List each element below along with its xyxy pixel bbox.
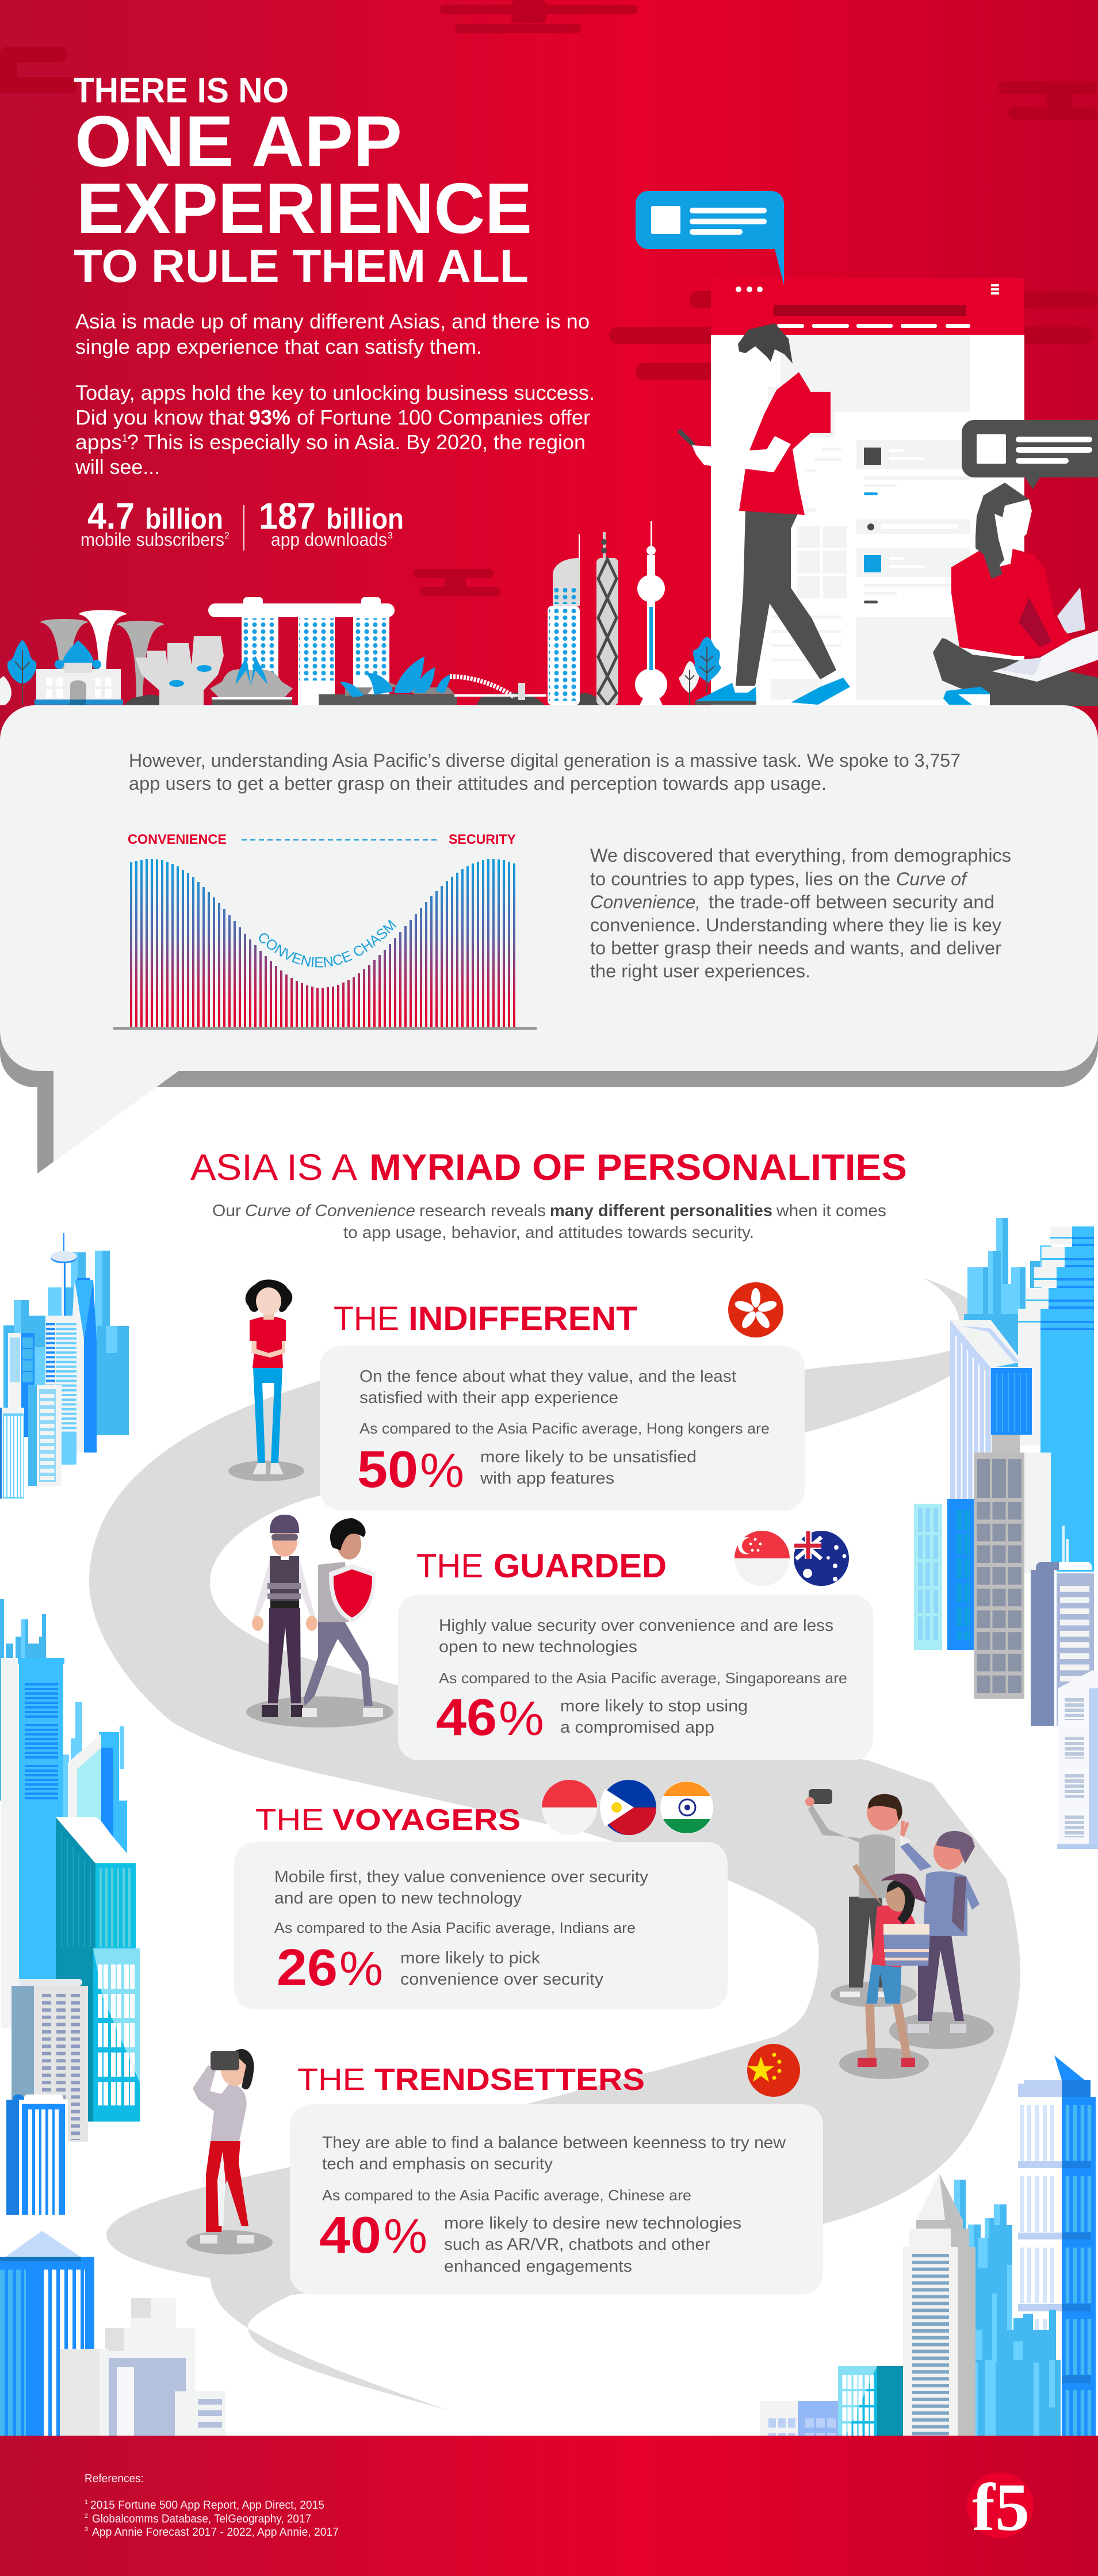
intro text: Today, apps hold the key to unlocking business success. xyxy=(75,381,595,404)
blue front block xyxy=(6,2095,68,2215)
references: 2015 Fortune 500 App Report, App Direct, 2015 xyxy=(90,2499,324,2512)
section intro: when it comes xyxy=(776,1202,886,1220)
description xyxy=(439,1616,847,1737)
discovery paragraph: Curve of xyxy=(896,869,968,889)
description: On the fence about what they value, and the least xyxy=(359,1367,736,1386)
section intro: research reveals xyxy=(419,1202,546,1220)
curve of convenience chart xyxy=(113,832,537,1030)
card xyxy=(290,2104,823,2294)
buildings: top right cluster xyxy=(914,1218,1098,1849)
woman with hat and bag xyxy=(852,1864,930,2067)
title: THE xyxy=(297,2062,365,2097)
shoe xyxy=(943,687,990,705)
description: more likely to desire new technologies xyxy=(444,2214,741,2233)
title: EXPERIENCE xyxy=(76,169,532,249)
security guard xyxy=(252,1515,317,1717)
description: such as AR/VR, chatbots and other xyxy=(444,2235,710,2254)
characters: travellers xyxy=(805,1789,994,2079)
title: TO RULE THEM ALL xyxy=(74,240,529,292)
description: They are able to find a balance between keenness to try new xyxy=(322,2134,786,2152)
section intro: Our xyxy=(212,1202,241,1220)
stat 40%: % xyxy=(384,2209,427,2263)
stat: app downloads: 3 xyxy=(388,531,393,541)
oriental pearl tower xyxy=(635,521,667,705)
discovery paragraph: the trade-off between security and xyxy=(709,892,994,912)
supertrees xyxy=(40,610,164,697)
man with shield xyxy=(302,1518,383,1717)
intro text: ? This is especially so in Asia. By 2020, the region xyxy=(127,430,586,454)
legs xyxy=(933,638,1098,706)
references: App Annie Forecast 2017 - 2022, App Annie, 2017 xyxy=(92,2526,339,2539)
bank of china tower xyxy=(596,532,618,705)
skyline xyxy=(0,521,721,705)
artscience museum xyxy=(135,636,224,705)
cyan tower xyxy=(93,1948,140,2122)
icon: india flag xyxy=(660,1781,713,1834)
title: ONE APP xyxy=(75,102,402,182)
stat 46%: % xyxy=(499,1691,544,1745)
plant xyxy=(0,640,36,705)
lilac buildings xyxy=(1031,1526,1094,1726)
references: Globalcomms Database, TelGeography, 2017 xyxy=(92,2513,311,2525)
woman with laptop xyxy=(933,483,1098,706)
character: vr user xyxy=(186,2049,273,2254)
stat 40% xyxy=(319,2207,427,2264)
icon: grey message bubble xyxy=(962,420,1098,490)
title xyxy=(74,71,532,292)
harbour bridge xyxy=(450,677,546,700)
intro text: of Fortune 100 Companies offer xyxy=(297,406,590,429)
laptop xyxy=(992,630,1098,682)
description: Mobile first, they value convenience over security xyxy=(274,1868,649,1886)
buildings: top left cluster xyxy=(0,1233,129,1499)
title xyxy=(416,1547,667,1585)
references: 1 xyxy=(85,2499,88,2506)
shirt xyxy=(739,372,814,515)
stat 26%: % xyxy=(339,1941,383,1996)
phone and hand xyxy=(679,430,694,445)
title: THERE IS NO xyxy=(74,71,289,110)
description xyxy=(359,1367,770,1488)
stat: app downloads xyxy=(259,495,404,550)
clouds xyxy=(0,0,1098,596)
references xyxy=(85,2472,339,2539)
title: THE xyxy=(255,1803,324,1837)
teal tower xyxy=(56,1817,136,2122)
title xyxy=(255,1803,521,1837)
section heading: MYRIAD OF PERSONALITIES xyxy=(369,1146,907,1188)
discovery paragraph xyxy=(590,845,1011,981)
intro text: Did you know that xyxy=(75,406,244,429)
description: As compared to the Asia Pacific average, Hong kongers are xyxy=(359,1420,770,1437)
description: As compared to the Asia Pacific average, Chinese are xyxy=(322,2187,691,2204)
description: a compromised app xyxy=(560,1718,714,1737)
stat: app downloads: app downloads xyxy=(271,529,387,550)
intro text: single app experience that can satisfy them. xyxy=(75,335,482,358)
grey office block xyxy=(12,1979,88,2142)
title: THE xyxy=(334,1300,399,1337)
marina bay sands xyxy=(208,597,395,705)
man with backpack xyxy=(900,1831,980,2033)
title: THE xyxy=(416,1547,483,1585)
card xyxy=(234,1842,728,2009)
section intro: Curve of Convenience xyxy=(245,1202,415,1220)
title: VOYAGERS xyxy=(332,1803,521,1837)
discovery paragraph: We discovered that everything, from demographics xyxy=(590,845,1011,866)
stat: mobile subscribers xyxy=(81,495,229,550)
intro text: apps xyxy=(75,430,122,454)
man with phone xyxy=(679,323,850,705)
taj mahal xyxy=(35,640,123,705)
footer background xyxy=(0,2436,1098,2576)
stat 26% xyxy=(277,1939,383,1997)
lilac tower xyxy=(950,1320,1023,1499)
panel body xyxy=(0,705,1098,1162)
icon: indonesia flag xyxy=(542,1780,597,1835)
f5 logo: f5 xyxy=(972,2470,1030,2545)
stat: mobile subscribers: 2 xyxy=(224,531,229,541)
description: As compared to the Asia Pacific average, Singaporeans are xyxy=(439,1669,847,1687)
discovery paragraph: Convenience, xyxy=(590,892,701,912)
tower with disc xyxy=(51,1233,77,1316)
icon: singapore flag xyxy=(734,1531,790,1586)
white building xyxy=(1057,1670,1098,1849)
discovery paragraph: the right user experiences. xyxy=(590,961,810,981)
intro text: 1 xyxy=(122,433,128,444)
intro text: Asia is made up of many different Asias, and there is no xyxy=(75,309,590,333)
characters xyxy=(246,1515,393,1727)
plant leaf xyxy=(1057,587,1085,634)
hair xyxy=(738,323,793,364)
spire tower xyxy=(903,2173,975,2436)
man with phone xyxy=(805,1789,908,1997)
card xyxy=(320,1346,805,1511)
teal tower xyxy=(838,2366,904,2436)
stepped tower xyxy=(1018,1226,1094,1572)
icon: china flag xyxy=(747,2044,800,2097)
grey tower xyxy=(974,1453,1024,1699)
section intro xyxy=(212,1202,886,1242)
icon: blue message bubble xyxy=(636,191,784,285)
persona: the trendsetters xyxy=(186,2044,823,2294)
title: GUARDED xyxy=(493,1547,667,1585)
hero background xyxy=(0,0,1098,748)
shoes xyxy=(695,683,756,701)
hong kong tower xyxy=(548,534,580,705)
discovery paragraph: to better grasp their needs and wants, and deliver xyxy=(590,938,1001,958)
card xyxy=(398,1595,873,1760)
stat 50%: % xyxy=(420,1443,464,1497)
icon: australia flag xyxy=(794,1531,849,1586)
stat 46%: 46 xyxy=(436,1689,497,1746)
buildings: middle left cluster xyxy=(0,1599,140,2215)
description: more likely to stop using xyxy=(560,1697,748,1715)
curve of convenience chart: CONVENIENCE xyxy=(128,832,227,847)
intro paragraph: However, understanding Asia Pacific’s diverse digital generation is a massive task. We spoke to 3,757 xyxy=(129,750,961,771)
description: open to new technologies xyxy=(439,1638,637,1656)
bushes xyxy=(125,693,609,705)
references: 3 xyxy=(85,2526,88,2533)
section heading: ASIA IS A xyxy=(190,1146,357,1188)
top xyxy=(951,548,1072,656)
app window xyxy=(711,278,1024,715)
road xyxy=(89,1278,1020,2410)
curve of convenience chart: SECURITY xyxy=(449,832,516,847)
description: with app features xyxy=(480,1469,614,1488)
description: Highly value security over convenience and are less xyxy=(439,1616,833,1635)
hero section xyxy=(0,0,1098,748)
speech bubble panel xyxy=(0,705,1098,1174)
buildings: bottom right cluster xyxy=(760,2055,1098,2436)
references: References: xyxy=(85,2472,144,2485)
discovery paragraph: convenience. Understanding where they lie is key xyxy=(590,915,1001,935)
description: satisfied with their app experience xyxy=(359,1389,618,1407)
intro text: 93% xyxy=(249,406,290,429)
trousers xyxy=(736,511,836,686)
persona: the indifferent xyxy=(228,1279,805,1511)
intro text: will see... xyxy=(75,455,160,479)
description: more likely to be unsatisfied xyxy=(480,1448,697,1466)
plants xyxy=(679,637,721,705)
description: more likely to pick xyxy=(400,1949,541,1967)
curve of convenience chart: CONVENIENCE CHASM xyxy=(259,919,397,968)
buildings: bottom left cluster xyxy=(0,2231,225,2436)
low arched buildings xyxy=(760,2401,838,2436)
panel shadow xyxy=(0,748,1098,1174)
section intro: to app usage, behavior, and attitudes towards security. xyxy=(343,1224,754,1242)
discovery paragraph: to countries to app types, lies on the xyxy=(590,869,890,889)
stat: mobile subscribers: mobile subscribers xyxy=(81,529,224,550)
red square xyxy=(810,392,831,433)
character xyxy=(228,1279,304,1481)
intro paragraph: app users to get a better grasp on their attitudes and perception towards app usage. xyxy=(129,773,827,794)
stat: app downloads: billion xyxy=(326,503,404,535)
title: TRENDSETTERS xyxy=(374,2062,645,2097)
blue cluster xyxy=(954,2180,1061,2436)
stat: mobile subscribers: 4.7 xyxy=(87,495,135,537)
description: and are open to new technology xyxy=(274,1889,522,1908)
sydney opera house xyxy=(319,656,457,705)
stat 50% xyxy=(357,1441,464,1499)
section intro: many different personalities xyxy=(550,1202,772,1220)
intro paragraph xyxy=(129,750,961,794)
tall pale and blue tower xyxy=(1018,2055,1098,2436)
stat 40%: 40 xyxy=(319,2207,381,2264)
title: INDIFFERENT xyxy=(408,1300,637,1337)
description xyxy=(322,2134,786,2276)
footer xyxy=(0,2436,1098,2576)
persona: the voyagers xyxy=(234,1780,994,2079)
hair xyxy=(975,483,1029,579)
persona: the guarded xyxy=(246,1515,873,1760)
stat 26%: 26 xyxy=(277,1939,338,1997)
stat 50%: 50 xyxy=(357,1441,418,1499)
stat: mobile subscribers: billion xyxy=(145,503,223,535)
references: 2 xyxy=(85,2513,88,2520)
stat: app downloads: 187 xyxy=(259,495,316,537)
stat 46% xyxy=(436,1689,544,1746)
intro text xyxy=(75,309,595,479)
face xyxy=(994,499,1032,567)
description: As compared to the Asia Pacific average, Indians are xyxy=(274,1919,636,1936)
lotus temple xyxy=(210,656,293,705)
description: convenience over security xyxy=(400,1970,604,1989)
description xyxy=(274,1868,649,1989)
icon: philippines flag xyxy=(600,1780,656,1835)
description: enhanced engagements xyxy=(444,2257,632,2276)
description: tech and emphasis on security xyxy=(322,2155,553,2173)
icon: hong kong flag xyxy=(728,1282,783,1337)
